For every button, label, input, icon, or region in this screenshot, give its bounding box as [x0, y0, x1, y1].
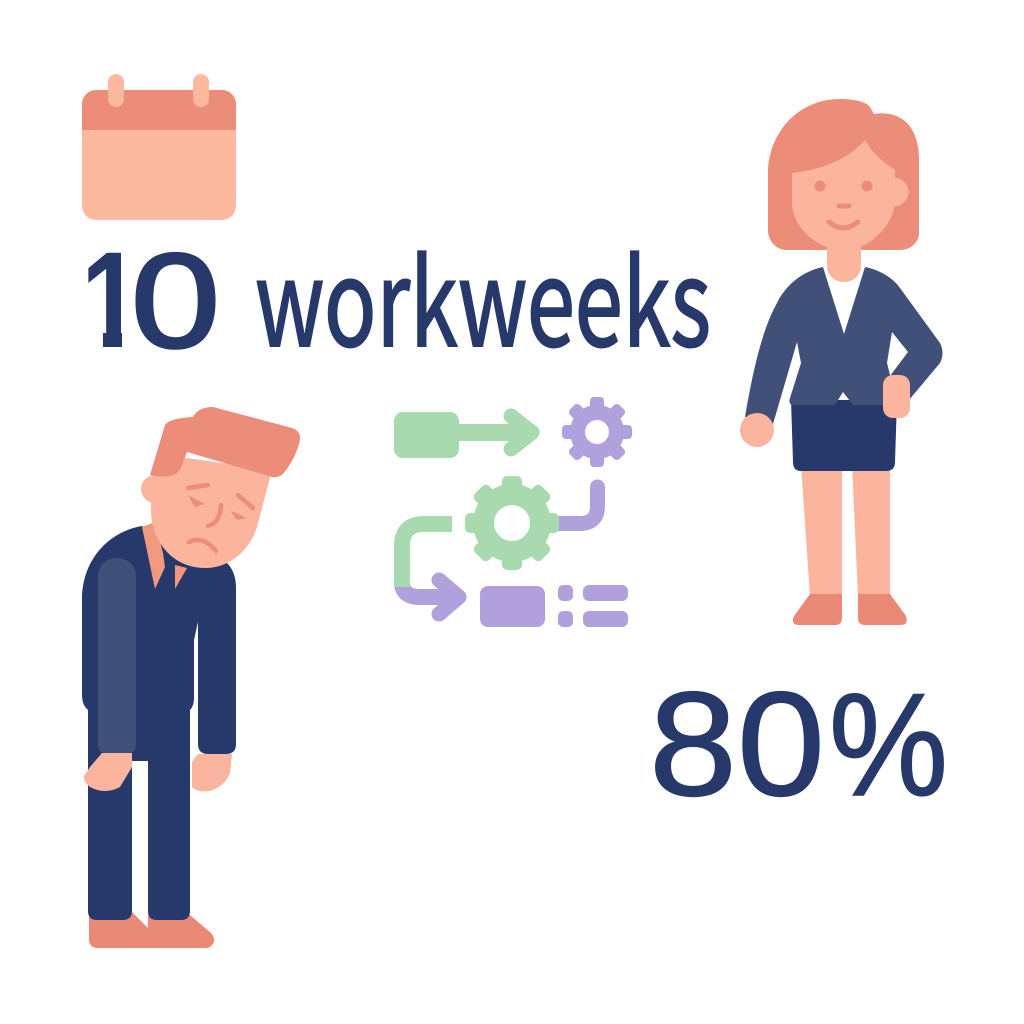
left hand: [84, 753, 132, 791]
legs: [801, 465, 890, 596]
process box and arrow: [394, 412, 532, 458]
purple connector: [540, 487, 598, 524]
ear: [880, 178, 908, 206]
neck: [827, 238, 861, 282]
collar: [142, 522, 187, 589]
purple box and list: [480, 585, 628, 627]
face: [151, 455, 272, 568]
shoes: [89, 912, 214, 948]
blazer: [745, 267, 942, 424]
face details: [188, 485, 253, 551]
stat: 80%: %: [829, 663, 948, 826]
stat: 80%: 80: [649, 662, 825, 827]
icon: calendar: [82, 74, 236, 220]
icon: process flow diagram: [394, 397, 632, 627]
green gear: [465, 476, 559, 570]
jacket: [82, 526, 236, 754]
heading: 10 workweeks: 1: [81, 224, 141, 377]
figure: tired man: [82, 407, 300, 948]
heading: 10 workweeks: [88, 250, 708, 350]
green connector: [402, 524, 452, 587]
sleeve highlight: [98, 558, 136, 753]
left hand: [740, 413, 774, 447]
purple gear: [562, 397, 632, 467]
right hand: [192, 754, 232, 792]
heading: 10 workweeks: workweeks: [255, 209, 711, 381]
face details: [814, 180, 872, 228]
skirt: [791, 400, 897, 471]
figure: confident woman: [740, 99, 942, 625]
shoes: [793, 594, 907, 625]
purple arrow: [402, 575, 459, 614]
hair: [768, 99, 919, 250]
face: [792, 140, 895, 250]
stat: 80%: [649, 662, 948, 827]
ear: [141, 475, 169, 503]
right hand: [883, 375, 910, 418]
heading: 10 workweeks: 0: [131, 227, 220, 376]
trousers: [88, 700, 190, 920]
hair: [150, 407, 300, 477]
